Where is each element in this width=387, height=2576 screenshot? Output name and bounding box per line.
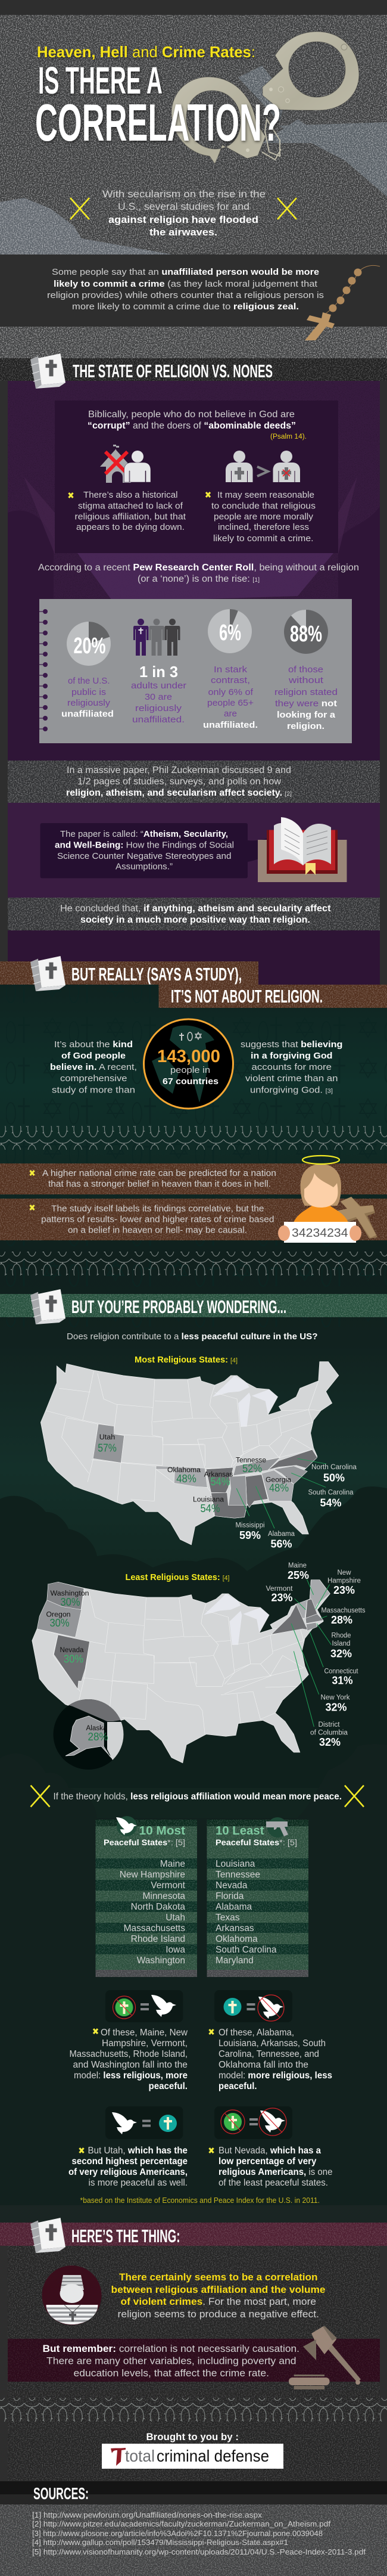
- stat: 6 percent caption: only 6% of: [208, 687, 254, 697]
- text: less religious more peaceful: [69, 2028, 188, 2091]
- text: historical stigma: There’s also a historical: [83, 491, 177, 500]
- panel: zuckerman strip: In a massive paper, Phil Zuckerman discussed 9 and: [67, 765, 291, 775]
- map labels: New: [337, 1569, 351, 1576]
- table: 10 least peaceful states: Maryland: [216, 1956, 254, 1966]
- text: if the theory holds: [31, 1786, 364, 1807]
- map labels: Connecticut: [324, 1668, 358, 1675]
- text: biblically: “corrupt” and the doers of “abominable deeds”: [88, 421, 296, 431]
- hair: [300, 1164, 341, 1206]
- text: more religious less peaceful: Carolina, Tennessee, and: [219, 2049, 319, 2059]
- intro text with yellow crosses: against religion have flooded: [108, 214, 258, 225]
- map labels: Hampshire: [327, 1577, 361, 1584]
- text: morally inclined: [206, 491, 316, 544]
- map labels: 32%: [330, 1647, 352, 1659]
- map labels: 52%: [242, 1463, 262, 1475]
- panel: paper callout: and Well-Being: How the Findings of Social: [55, 840, 234, 850]
- text: forgiving god: unforgiving God. [3]: [250, 1085, 333, 1095]
- map labels: 56%: [270, 1538, 292, 1550]
- notebook spiral: [39, 612, 45, 729]
- panel: dark intro band: religion provides) while others counter that a religious person is: [47, 290, 324, 300]
- map labels: Tennesse: [236, 1457, 266, 1464]
- stat: one in three caption: 1 in 3: [139, 663, 178, 681]
- panel: brown bars: that has a stronger belief in heaven than it does in hell.: [48, 1180, 271, 1189]
- heading: here's the thing: [0, 2218, 387, 2253]
- text: if the theory holds: If the theory holds, less religious affiliation would mean more peace.: [54, 1792, 342, 1802]
- heading: but you're probably wondering: [0, 1289, 387, 1324]
- map labels: Missisippi: [236, 1522, 264, 1529]
- table: 10 most peaceful states: Massachusetts: [124, 1923, 185, 1933]
- intro text with yellow crosses: [70, 188, 297, 238]
- graphic: 143,000 globe badge: 143,000: [157, 1047, 220, 1066]
- icon: priest prisoner: [42, 2265, 101, 2325]
- stat: 20 percent caption: of the U.S.: [68, 676, 110, 686]
- icon: bible: [30, 956, 65, 991]
- icon: church crossed out with person: [100, 442, 151, 483]
- stat: one in three caption: religiously: [135, 703, 182, 713]
- stat: 20 percent caption: religiously: [67, 698, 111, 708]
- stat: one in three caption: [131, 663, 186, 725]
- table: 10 least peaceful states: 10 Least: [216, 1824, 264, 1838]
- bullet: [80, 2148, 83, 2153]
- map labels: 54%: [200, 1503, 220, 1514]
- panel: brown bars: patterns of results- lower and higher rates of crime based: [41, 1215, 274, 1224]
- table: 10 least peaceful states: South Carolina: [216, 1945, 277, 1955]
- text: forgiving god: in a forgiving God: [251, 1051, 332, 1061]
- text: forgiving god: violent crime than an: [245, 1073, 338, 1084]
- text: correlation statement: of violent crimes. For the most part, more: [120, 2296, 316, 2307]
- text: kind of god: study of more than: [52, 1085, 135, 1095]
- shirt: [294, 1205, 348, 1222]
- map labels: Louisiana: [193, 1496, 224, 1503]
- text: morally inclined: likely to commit a crime.: [213, 534, 313, 544]
- icon: yellow x right: [345, 1786, 364, 1807]
- icon: open book: [258, 817, 347, 882]
- text: nevada: religious Americans, is one: [219, 2167, 332, 2177]
- panel: dark intro band: [0, 255, 387, 327]
- text: morally inclined: to conclude that religious: [211, 502, 316, 511]
- text: less religious more peaceful: peaceful.: [149, 2081, 188, 2091]
- purple tail: [8, 930, 380, 985]
- stat: one in three caption: 30 are: [145, 692, 172, 702]
- asphalt strip: [0, 327, 387, 358]
- map labels: Nevada: [60, 1647, 84, 1654]
- stat: 88 percent caption: without: [288, 675, 324, 685]
- table: 10 least peaceful states: Florida: [216, 1891, 244, 1901]
- table: 10 most peaceful states: North Dakota: [131, 1902, 185, 1912]
- table: 10 most peaceful states: Iowa: [166, 1945, 185, 1955]
- handcuff: chain: [262, 119, 281, 160]
- heading: but really says a study: BUT REALLY (SAYS A STUDY),: [71, 964, 242, 985]
- panel: zuckerman strip: [8, 761, 380, 803]
- map labels: Oregon: [46, 1612, 70, 1619]
- table: 10 least peaceful states: Arkansas: [216, 1923, 254, 1933]
- stat: 6 percent caption: In stark: [214, 665, 248, 675]
- handcuff: lower ring: [171, 77, 266, 164]
- map labels: 54%: [320, 1497, 342, 1509]
- stat: 6 percent caption: unaffiliated.: [203, 720, 258, 730]
- icon: prisoner with halo and cross: [278, 1156, 377, 1243]
- stat: 6 percent pie: 6%: [219, 620, 241, 645]
- text: pew research: [38, 563, 359, 584]
- panel: brown bars: [0, 1163, 387, 1240]
- inner dark box: [55, 401, 338, 553]
- handcuff: upper ring: [263, 32, 359, 110]
- text: utah: is more peaceful as well.: [88, 2178, 188, 2188]
- graphic: 143,000 globe badge: 67 countries: [163, 1076, 219, 1087]
- map labels: of Columbia: [310, 1730, 348, 1737]
- table: 10 most peaceful states: 10 Most: [139, 1824, 185, 1838]
- text: brought to you by: Brought to you by :: [146, 2431, 239, 2442]
- panel: zuckerman strip: religion, atheism, and secularism affect society. [2]: [66, 788, 292, 798]
- icon box: peace equals religion (utah): [105, 2106, 183, 2139]
- map labels: Massachusetts: [322, 1607, 366, 1614]
- heading: least religious states: Least Religious States: [4]: [125, 1572, 230, 1582]
- map: least religious states: [32, 1562, 366, 1763]
- intro text with yellow crosses: the airwaves.: [149, 226, 217, 238]
- text: forgiving god: suggests that believing: [241, 1039, 343, 1050]
- icon: yellow x left: [70, 198, 89, 219]
- icon: bible: [30, 1289, 65, 1324]
- panel: here's the thing (dark asphalt): [8, 2246, 380, 2481]
- bullet: [93, 2029, 98, 2034]
- stat: 88 percent caption: they were not: [275, 699, 337, 709]
- text: forgiving god: accounts for more: [251, 1062, 332, 1072]
- logo: total criminal defense: total: [125, 2447, 155, 2465]
- text: historical stigma: [69, 491, 186, 532]
- table: 10 most peaceful states: [95, 1816, 197, 1977]
- table: 10 most peaceful states: Maine: [160, 1859, 185, 1869]
- text: historical stigma: religious affiliation, but that: [75, 513, 186, 522]
- stat: 20 percent caption: [61, 676, 114, 719]
- table: 10 least peaceful states: Oklahoma: [216, 1934, 258, 1944]
- stat: 6 percent pie: [208, 609, 252, 653]
- logo: total criminal defense: [102, 2444, 283, 2469]
- text: correlation statement: between religious affiliation and the volume: [111, 2284, 325, 2295]
- map labels: New York: [320, 1694, 350, 1701]
- text: more religious less peaceful: Louisiana, Arkansas, South: [219, 2038, 326, 2049]
- panel: brown bars: on a belief in heaven or hell- may be causal.: [68, 1225, 247, 1235]
- panel: brown bars: The study itself labels its findings correlative, but the: [51, 1204, 264, 1213]
- panel: paper callout: Assumptions.”: [116, 862, 173, 871]
- stat: 20 percent pie: 20%: [74, 634, 106, 659]
- text: morally inclined: It may seem reasonable: [217, 491, 314, 500]
- table: 10 least peaceful states: Texas: [216, 1913, 240, 1923]
- map labels: Island: [332, 1640, 350, 1647]
- map labels: [46, 1562, 366, 1748]
- panel: conclusion strip: He concluded that, if anything, atheism and secularity affect: [60, 904, 331, 914]
- panel: but remember band: [8, 2339, 380, 2382]
- icon: gavel: [289, 2326, 361, 2389]
- table: 10 least peaceful states: [207, 1817, 308, 1977]
- panel: notebook statistics: [39, 599, 352, 743]
- source list: [1] http://www.pewforum.org/Unaffiliated/nones-on-the-rise.aspx: [32, 2511, 263, 2519]
- source list: [32, 2511, 366, 2556]
- text: nevada: of the least peaceful states.: [219, 2178, 328, 2188]
- stat: 20 percent caption: unaffiliated: [61, 709, 114, 719]
- stat: 88 percent caption: religion stated: [274, 687, 338, 697]
- text: less religious more peaceful: and Washington fall into the: [73, 2060, 188, 2070]
- table: 10 least peaceful states: Tennessee: [216, 1870, 260, 1880]
- intro text with yellow crosses: With secularism on the rise in the: [102, 188, 266, 200]
- icon: rosary: [305, 265, 380, 340]
- map labels: 23%: [333, 1584, 355, 1596]
- table: 10 least peaceful states: Peaceful States *: [5]: [216, 1838, 297, 1847]
- bullet: [69, 493, 73, 498]
- stat: 88 percent caption: religion.: [287, 721, 324, 731]
- text: nevada: [210, 2146, 332, 2188]
- text: utah: But Utah, which has the: [88, 2146, 188, 2156]
- text: question: Does religion contribute to a less peaceful culture in the US?: [67, 1332, 318, 1342]
- table: 10 most peaceful states: Rhode Island: [131, 1934, 185, 1944]
- heading: most religious states: Most Religious States: [4]: [135, 1355, 238, 1365]
- icon: yellow x left: [31, 1786, 50, 1807]
- panel: paper callout: The paper is called: “ Atheism, Secularity,: [60, 830, 228, 839]
- text: less religious more peaceful: Massachusetts, Rhode Island,: [69, 2049, 188, 2059]
- map labels: 59%: [239, 1529, 261, 1541]
- map inset: alaska: Alaska: [86, 1725, 107, 1732]
- panel: green section background: [0, 985, 387, 2223]
- stat: 6 percent caption: people 65+: [207, 698, 254, 708]
- stat: 6 percent caption: contrast,: [211, 675, 250, 685]
- heading: sources: SOURCES:: [33, 2484, 89, 2503]
- footnote: *based on the Institute of Economics and Peace Index for the U.S. in 2011.: [80, 2196, 320, 2205]
- icon: pistol: [266, 1817, 288, 1838]
- table: 10 most peaceful states: Minnesota: [142, 1891, 185, 1901]
- text: correlation statement: There certainly seems to be a correlation: [119, 2271, 318, 2283]
- stat: 20 percent pie: [67, 622, 111, 666]
- text: more religious less peaceful: peaceful.: [219, 2081, 257, 2091]
- title: line one: IS THERE A: [38, 59, 163, 102]
- text: biblically: (Psalm 14).: [270, 433, 307, 440]
- graphic: 143,000 globe badge: [144, 1019, 233, 1109]
- panel: zuckerman strip: 1/2 pages of studies, surveys, and polls on how: [77, 777, 282, 787]
- icon: bible: [30, 353, 65, 389]
- map labels: Rhode: [331, 1632, 351, 1639]
- face: [304, 1173, 338, 1208]
- text: morally inclined: inclined, therefore less: [218, 523, 309, 532]
- text: less religious more peaceful: model: less religious, more: [74, 2071, 188, 2081]
- table: 10 least peaceful states: Nevada: [216, 1880, 248, 1891]
- map labels: 30%: [61, 1596, 80, 1608]
- icon: religious person greater than non religious: [226, 451, 300, 482]
- text: kind of god: It’s about the kind: [54, 1039, 133, 1050]
- map labels: 50%: [323, 1472, 345, 1484]
- table: 10 most peaceful states: Vermont: [151, 1880, 186, 1891]
- text: pew research: (or a ‘none’) is on the rise: [1]: [138, 574, 260, 584]
- text: kind of god: believe in. A recent,: [50, 1062, 137, 1072]
- map labels: [98, 1434, 357, 1550]
- table: 10 least peaceful states: Louisiana: [216, 1859, 255, 1869]
- map labels: 30%: [50, 1617, 69, 1629]
- panel: asphalt hero: [0, 15, 387, 255]
- panel: dark intro band: likely to commit a crime (as they lack moral judgement that: [54, 279, 318, 289]
- icon: dove: [116, 1816, 137, 1836]
- panel: paper callout: Science Counter Negative Stereotypes and: [57, 852, 231, 861]
- panel: dark intro band: Some people say that an unaffiliated person would be more: [52, 267, 319, 277]
- stat: 88 percent pie: 88%: [290, 622, 322, 647]
- icon box: no religion no peace (nevada): [214, 2106, 292, 2139]
- text: less religious more peaceful: Of these, Maine, New: [101, 2028, 188, 2038]
- stat: one in three people: [133, 619, 180, 656]
- text: kind of god: [50, 1039, 137, 1095]
- panel: conclusion strip: society in a much more positive way than religion.: [80, 915, 310, 925]
- text: historical stigma: stigma attached to lack of: [78, 502, 183, 511]
- text: utah: [68, 2146, 188, 2188]
- title: kicker: Heaven, Hell and Crime Rates:: [37, 43, 255, 61]
- text: forgiving god: [241, 1039, 343, 1095]
- map labels: 28%: [331, 1614, 352, 1626]
- clouds behind map: [0, 1486, 387, 1788]
- icon box: religion equals no peace: [214, 1990, 292, 2022]
- bullet: [30, 1171, 35, 1175]
- map labels: 48%: [269, 1482, 289, 1494]
- map labels: Georgia: [266, 1477, 292, 1484]
- map inset: alaska: [54, 1699, 124, 1770]
- text: utah: second highest percentage: [71, 2156, 188, 2167]
- stat: 88 percent caption: of those: [288, 665, 323, 675]
- table: 10 most peaceful states: Utah: [166, 1913, 185, 1923]
- map labels: 30%: [64, 1653, 83, 1665]
- panel: dark intro band: more likely to commit a crime due to religious zeal.: [72, 302, 299, 312]
- panel: paper callout: [8, 803, 380, 898]
- text: more religious less peaceful: [210, 2028, 332, 2091]
- table: 10 least peaceful states: Alabama: [216, 1902, 252, 1912]
- bullet: [210, 2148, 213, 2153]
- source list: [3] http://www.plosone.org/article/info%3Adoi%2F10.1371%2Fjournal.pone.0039048: [32, 2530, 323, 2538]
- text: pew research: According to a recent Pew Research Center Roll , being without a religion: [38, 563, 359, 573]
- heading: here's the thing: HERE’S THE THING:: [71, 2226, 180, 2246]
- heading: but really says a study: [0, 956, 387, 1008]
- bullet: [210, 2029, 213, 2034]
- stat: 6 percent caption: are: [224, 709, 237, 719]
- text: kind of god: comprehensive: [60, 1073, 127, 1084]
- barbed wire: [0, 1252, 387, 1275]
- source list: [5] http://www.visionofhumanity.org/wp-content/uploads/2011/04/U.S.-Peace-Index-2011-3.pdf: [32, 2548, 366, 2556]
- stat: one in three caption: adults under: [131, 681, 186, 691]
- map inset: alaska: 28%: [88, 1731, 108, 1743]
- map labels: Arkansas: [204, 1471, 233, 1478]
- panel: but remember band: There are many other variables, including poverty and: [46, 2355, 297, 2366]
- table: 10 most peaceful states: Peaceful States *: [5]: [104, 1838, 185, 1847]
- text: correlation statement: [111, 2271, 325, 2320]
- map labels: 32%: [319, 1736, 341, 1748]
- intro text with yellow crosses: U.S., several studies for and: [118, 201, 249, 212]
- icon: bible: [30, 2218, 65, 2253]
- text: kind of god: of God people: [61, 1051, 126, 1061]
- panel: but remember band: But remember: correlation is not necessarily causation.: [43, 2343, 299, 2354]
- table: 10 most peaceful states: Washington: [137, 1956, 185, 1966]
- icon box: no religion equals peace: [105, 1990, 183, 2022]
- text: nevada: low percentage of very: [219, 2156, 317, 2167]
- icon: handcuffs: [171, 32, 359, 164]
- stat: 6 percent caption: [203, 665, 258, 730]
- stat: 88 percent caption: [274, 665, 338, 731]
- text: historical stigma: appears to be dying down.: [76, 523, 185, 532]
- map labels: North Carolina: [311, 1464, 357, 1471]
- panel: sources: [0, 2481, 387, 2576]
- map: most religious states: [40, 1362, 357, 1550]
- map labels: 25%: [288, 1569, 309, 1581]
- stat: 20 percent caption: public is: [71, 687, 106, 697]
- text: more religious less peaceful: model: more religious, less: [219, 2071, 332, 2081]
- barbed wire: [0, 2398, 387, 2422]
- map labels: 32%: [325, 1701, 347, 1713]
- stat: 88 percent pie: [284, 610, 328, 654]
- map labels: Oklahoma: [167, 1467, 201, 1474]
- heading: the state of religion vs nones: [0, 353, 387, 389]
- map labels: 54%: [211, 1476, 230, 1488]
- stat: one in three caption: unaffiliated.: [132, 715, 185, 725]
- map labels: Utah: [99, 1434, 115, 1441]
- map labels: Alabama: [268, 1531, 295, 1538]
- logo: total criminal defense: criminal defense: [157, 2447, 269, 2465]
- map labels: 48%: [176, 1473, 196, 1485]
- stat: 88 percent caption: looking for a: [277, 710, 336, 720]
- sign: [284, 1222, 356, 1243]
- icon: yellow x right: [277, 198, 297, 219]
- map labels: South Carolina: [308, 1489, 354, 1496]
- panel: brown bars: A higher national crime rate can be predicted for a nation: [42, 1169, 276, 1178]
- graphic: 143,000 globe badge: people in: [170, 1065, 210, 1075]
- text: biblically: Biblically, people who do not believe in God are: [88, 409, 295, 420]
- title: [35, 43, 281, 152]
- map labels: Maine: [288, 1562, 307, 1569]
- text: more religious less peaceful: Of these, Alabama,: [219, 2028, 294, 2038]
- map labels: Washington: [50, 1590, 89, 1597]
- map labels: Vermont: [266, 1585, 293, 1593]
- map labels: 31%: [332, 1675, 352, 1687]
- barbed wire: [0, 1126, 387, 1150]
- text: correlation statement: religion seems to produce a negative effect.: [118, 2308, 319, 2320]
- panel: state of religion (purple): [8, 380, 380, 985]
- map labels: District: [318, 1721, 340, 1728]
- cross: [335, 1197, 377, 1239]
- map labels: 23%: [271, 1591, 293, 1603]
- halo: [302, 1156, 339, 1164]
- bullet: [30, 1205, 35, 1210]
- text: morally inclined: people are more morally: [214, 513, 314, 522]
- bullet: [206, 492, 210, 497]
- text: nevada: But Nevada, which has a: [219, 2146, 321, 2156]
- text: less religious more peaceful: Hampshire, Vermont,: [102, 2038, 188, 2049]
- map labels: 57%: [98, 1442, 117, 1454]
- panel: but remember band: education levels, that affect the crime rate.: [74, 2367, 269, 2379]
- source list: [2] http://www.pitzer.edu/academics/faculty/zuckerman/Zuckerman_on_Atheism.pdf: [32, 2520, 331, 2528]
- text: biblically: [88, 409, 307, 440]
- table: 10 most peaceful states: New Hampshire: [120, 1870, 185, 1880]
- icon: prisoner with halo and cross: 34234234: [292, 1227, 348, 1240]
- text: more religious less peaceful: Oklahoma fall into the: [219, 2060, 308, 2070]
- panel: conclusion strip: [8, 898, 380, 930]
- source list: [4] http://www.gallup.com/poll/153479/Mississippi-Religious-State.aspx#1: [32, 2538, 288, 2547]
- text: utah: of very religious Americans,: [68, 2167, 188, 2177]
